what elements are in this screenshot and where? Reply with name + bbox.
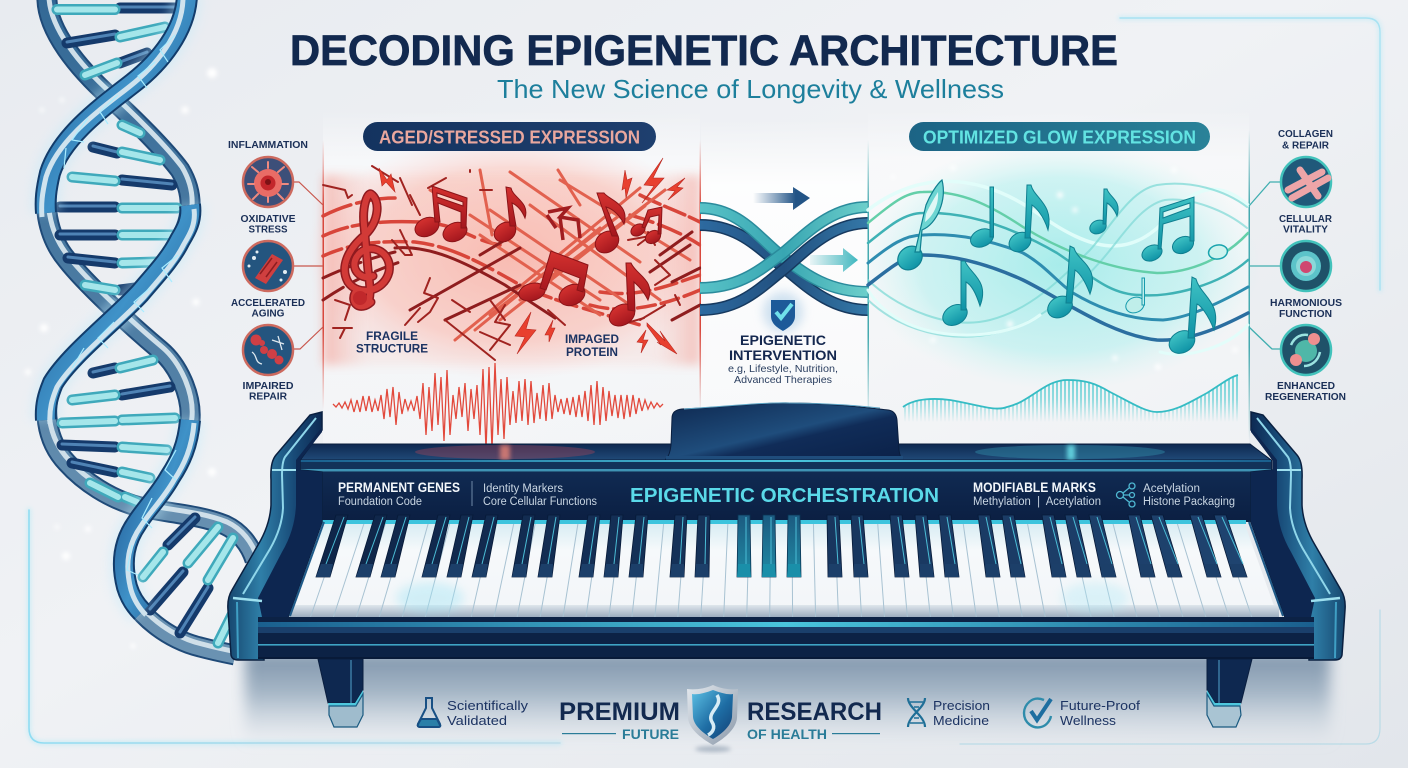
text: epigenetic intervention: INTERVENTION <box>729 348 837 363</box>
piano body <box>299 444 1272 522</box>
label: impaired repair <box>242 380 294 402</box>
right benefits column <box>1249 128 1346 403</box>
intertwined ribbons <box>700 207 868 310</box>
logo: research of health <box>747 698 882 742</box>
teal note with flag <box>1006 185 1049 256</box>
teal low note <box>939 261 983 330</box>
text: future-proof wellness <box>1060 698 1140 728</box>
label: impaged protein: IMPAGED <box>565 334 619 346</box>
text: permanent genes: PERMANENT GENES <box>338 480 460 495</box>
icon: regeneration cycle <box>1281 325 1331 375</box>
label: accelerated aging: ACCELERATED <box>231 297 305 309</box>
teal panel background <box>860 110 1260 444</box>
panel: epigenetic intervention <box>700 120 868 442</box>
label: fragile structure: FRAGILE <box>366 331 418 343</box>
label: harmonious function <box>1270 297 1342 320</box>
connector lines <box>1249 182 1281 349</box>
teal big note <box>893 180 943 275</box>
text: epigenetic orchestration: EPIGENETIC ORCHESTRATION <box>630 485 939 507</box>
subtitle: The New Science of Longevity & Wellness <box>497 74 1004 104</box>
music desk <box>666 403 903 460</box>
text: precision medicine <box>933 698 990 728</box>
red cracked note <box>547 208 580 240</box>
lightning bolts <box>379 158 685 354</box>
DNA sparkles <box>25 68 217 648</box>
icon: inflamed cell <box>243 157 293 207</box>
heading badge: optimized glow: OPTIMIZED GLOW EXPRESSION <box>923 128 1196 148</box>
glow sparkles <box>891 166 1238 370</box>
red single note <box>490 187 526 246</box>
piano right cheek <box>1249 412 1345 660</box>
key glow strip <box>322 520 1246 524</box>
red panel background <box>307 110 717 444</box>
text: scientifically validated: Scientifically <box>447 698 529 713</box>
arrow: navy <box>753 187 810 210</box>
DNA base-pair rungs <box>57 7 233 643</box>
icon: broken protein chain <box>243 325 293 375</box>
piano front rail <box>258 617 1314 659</box>
label: accelerated aging <box>231 297 305 320</box>
icon: flask <box>418 698 440 727</box>
label: cellular vitality <box>1279 213 1332 236</box>
icon: future check <box>1024 699 1051 727</box>
red beamed note <box>412 186 470 245</box>
footer <box>418 685 1140 752</box>
icon: damaged mitochondrion <box>243 241 293 291</box>
text: modifiable marks <box>973 480 1101 508</box>
label: collagen & repair <box>1278 128 1333 152</box>
black keys <box>316 515 1247 577</box>
piano floor shadow <box>245 652 1330 744</box>
treble clef <box>345 194 389 306</box>
text: scientifically validated: Validated <box>447 713 507 728</box>
text: permanent genes <box>338 480 460 508</box>
piano <box>228 403 1345 727</box>
label: cellular vitality: CELLULAR <box>1279 213 1332 225</box>
label: impaged protein: PROTEIN <box>566 347 618 359</box>
label: impaged protein <box>565 334 619 359</box>
text: future-proof wellness: Future-Proof <box>1060 698 1140 713</box>
arrow: teal <box>810 248 858 272</box>
label: collagen & repair: COLLAGEN <box>1278 128 1333 140</box>
label: oxidative stress: STRESS <box>248 224 288 236</box>
center background <box>701 120 868 442</box>
text: epigenetic intervention: e.g, Lifestyle, Nutrition, <box>728 363 838 375</box>
text: modifiable marks: Methylation | Acetylation <box>973 496 1101 508</box>
text: epigenetic intervention <box>728 333 838 386</box>
teal mid note <box>1044 246 1093 322</box>
icon: dna <box>908 698 925 727</box>
icon: network nodes <box>1116 483 1135 507</box>
logo: research of health: OF HEALTH <box>747 726 827 742</box>
text: identity markers <box>472 481 597 508</box>
text: future-proof wellness: Wellness <box>1060 713 1117 728</box>
label: enhanced regeneration <box>1265 380 1346 403</box>
text: epigenetic intervention: EPIGENETIC <box>740 333 826 348</box>
heading badge: aged/stressed <box>363 122 656 151</box>
text: identity markers: Core Cellular Functions <box>483 496 597 508</box>
piano left cheek <box>228 412 324 660</box>
label: inflammation: INFLAMMATION <box>228 139 308 151</box>
red small beamed note <box>629 207 663 246</box>
text: modifiable marks: MODIFIABLE MARKS <box>973 480 1096 495</box>
label: fragile structure: STRUCTURE <box>356 344 428 356</box>
label: enhanced regeneration: REGENERATION <box>1265 391 1346 403</box>
label: fragile structure <box>356 331 428 356</box>
piano right leg <box>1207 659 1252 727</box>
red single note <box>591 193 625 257</box>
panel: aged/stressed expression <box>307 110 717 449</box>
text: identity markers: Identity Markers <box>483 483 563 495</box>
logo: research of health: RESEARCH <box>747 698 882 726</box>
icon: logo shield <box>687 685 738 752</box>
text: permanent genes: Foundation Code <box>338 496 422 508</box>
teal small stem note <box>1123 278 1147 316</box>
piano left leg <box>318 659 363 727</box>
label: accelerated aging: AGING <box>252 308 284 320</box>
broken musical staff <box>323 166 700 360</box>
label: cellular vitality: VITALITY <box>1283 224 1328 236</box>
label: harmonious function: FUNCTION <box>1279 308 1332 320</box>
label: collagen & repair: & REPAIR <box>1282 140 1329 152</box>
icon: collagen fibers <box>1281 157 1331 207</box>
left factors column <box>228 139 323 402</box>
DNA double helix <box>25 0 257 655</box>
panel: optimized glow expression <box>860 110 1260 444</box>
red waveform <box>333 363 663 449</box>
logo: premium future <box>559 698 680 742</box>
text: acetylation and histone packaging: Acetylation <box>1143 483 1200 495</box>
title: DECODING EPIGENETIC ARCHITECTURE <box>290 27 1118 75</box>
text: precision medicine: Precision <box>933 698 990 713</box>
white keys <box>286 522 1279 617</box>
icon: vital cell <box>1281 241 1331 291</box>
teal large lower note <box>1165 277 1216 358</box>
logo: premium future: PREMIUM <box>559 698 680 726</box>
DNA front strands with energy glow <box>42 0 194 615</box>
red large beamed note <box>517 251 588 310</box>
heading badge: optimized glow <box>909 122 1210 151</box>
text: acetylation and histone packaging: Histone Packaging <box>1143 496 1235 508</box>
logo: premium future: FUTURE <box>622 726 679 742</box>
text: epigenetic intervention: Advanced Therapies <box>734 374 832 386</box>
connector lines <box>294 182 323 349</box>
label: impaired repair: IMPAIRED <box>242 380 294 392</box>
teal pale note head <box>1207 243 1229 261</box>
label: enhanced regeneration: ENHANCED <box>1277 380 1335 392</box>
icon: shield check <box>763 292 803 332</box>
text: precision medicine: Medicine <box>933 713 989 728</box>
teal waveform <box>903 375 1238 422</box>
teal small note <box>1088 189 1118 236</box>
heading badge: aged/stressed: AGED/STRESSED EXPRESSION <box>379 128 640 148</box>
flowing musical staff <box>868 181 1248 354</box>
label: oxidative stress <box>240 213 296 236</box>
teal beamed note <box>1139 197 1196 264</box>
DNA back strands <box>46 0 257 655</box>
label: oxidative stress: OXIDATIVE <box>240 213 296 225</box>
text: acetylation and histone packaging <box>1143 483 1235 508</box>
red large single note <box>605 263 650 330</box>
label: harmonious function: HARMONIOUS <box>1270 297 1342 309</box>
label: impaired repair: REPAIR <box>249 390 287 402</box>
text: scientifically validated <box>447 698 529 728</box>
teal note <box>968 187 996 251</box>
